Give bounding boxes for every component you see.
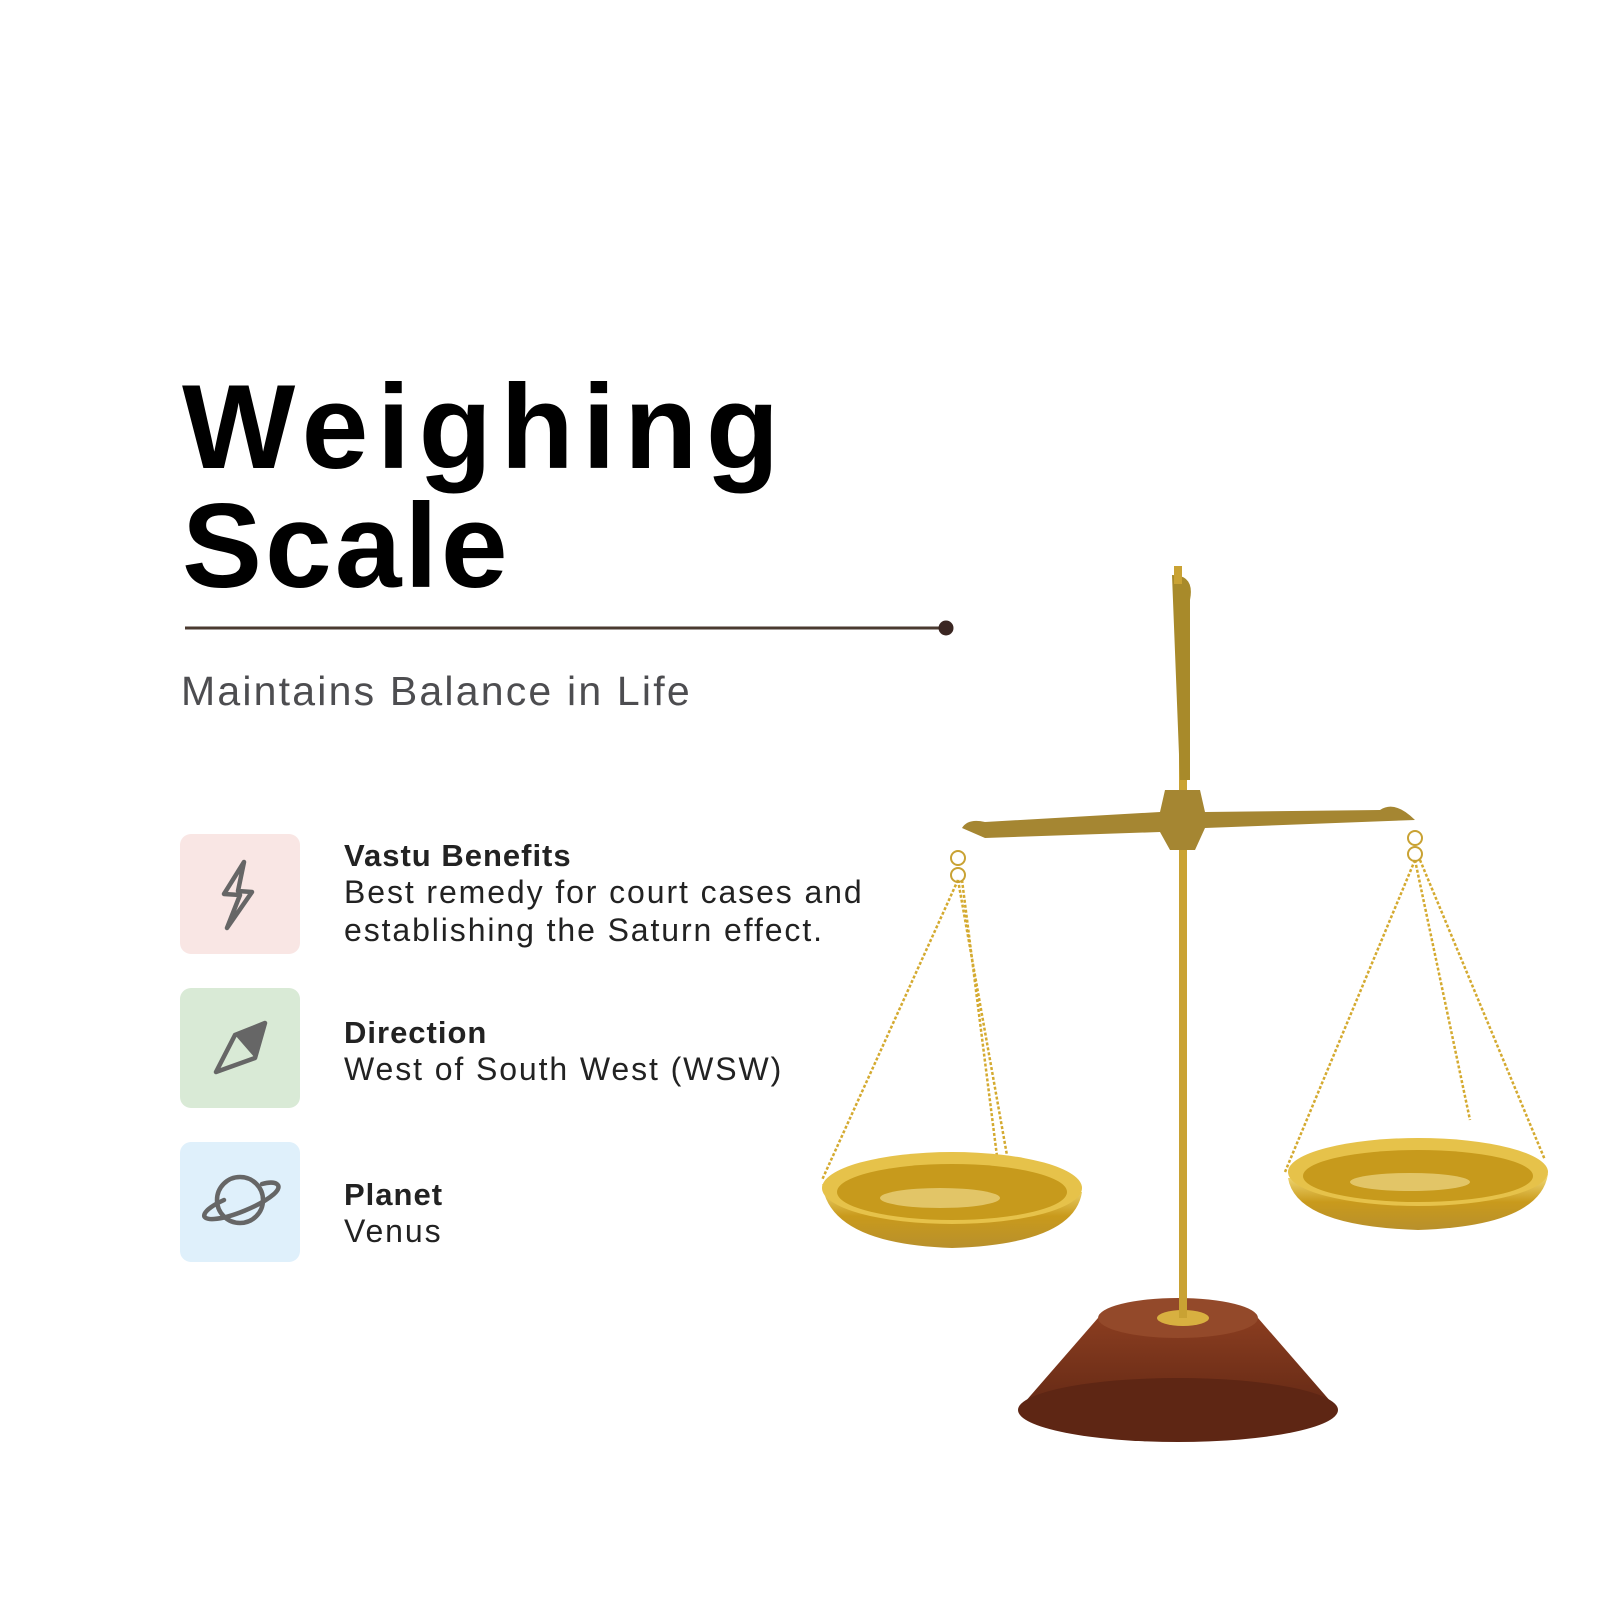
icon: compass [180,988,300,1108]
illustration: weighing scale [822,566,1548,1442]
item: direction: West of South West (WSW) [344,1051,783,1087]
title: Weighing [182,360,788,494]
beam [962,790,1415,850]
base [1018,1318,1338,1435]
pole [1179,585,1187,1318]
item: direction [344,1015,783,1087]
title: Scale [182,479,511,613]
item: vastu benefits [344,838,864,948]
item: vastu benefits: Vastu Benefits [344,838,572,873]
item: planet: Planet [344,1177,443,1212]
item: planet [344,1177,443,1249]
icon: lightning [180,834,300,954]
left pan [822,1184,1082,1248]
chains [822,860,1545,1206]
item: vastu benefits: Best remedy for court cases and [344,874,864,910]
icon: planet [180,1142,300,1262]
subtitle: Maintains Balance in Life [181,668,692,714]
divider line with dot [185,620,954,636]
item: vastu benefits: establishing the Saturn effect. [344,912,824,948]
item: direction: Direction [344,1015,487,1050]
title [182,360,788,613]
item: planet: Venus [344,1213,442,1249]
right pan [1288,1174,1548,1230]
